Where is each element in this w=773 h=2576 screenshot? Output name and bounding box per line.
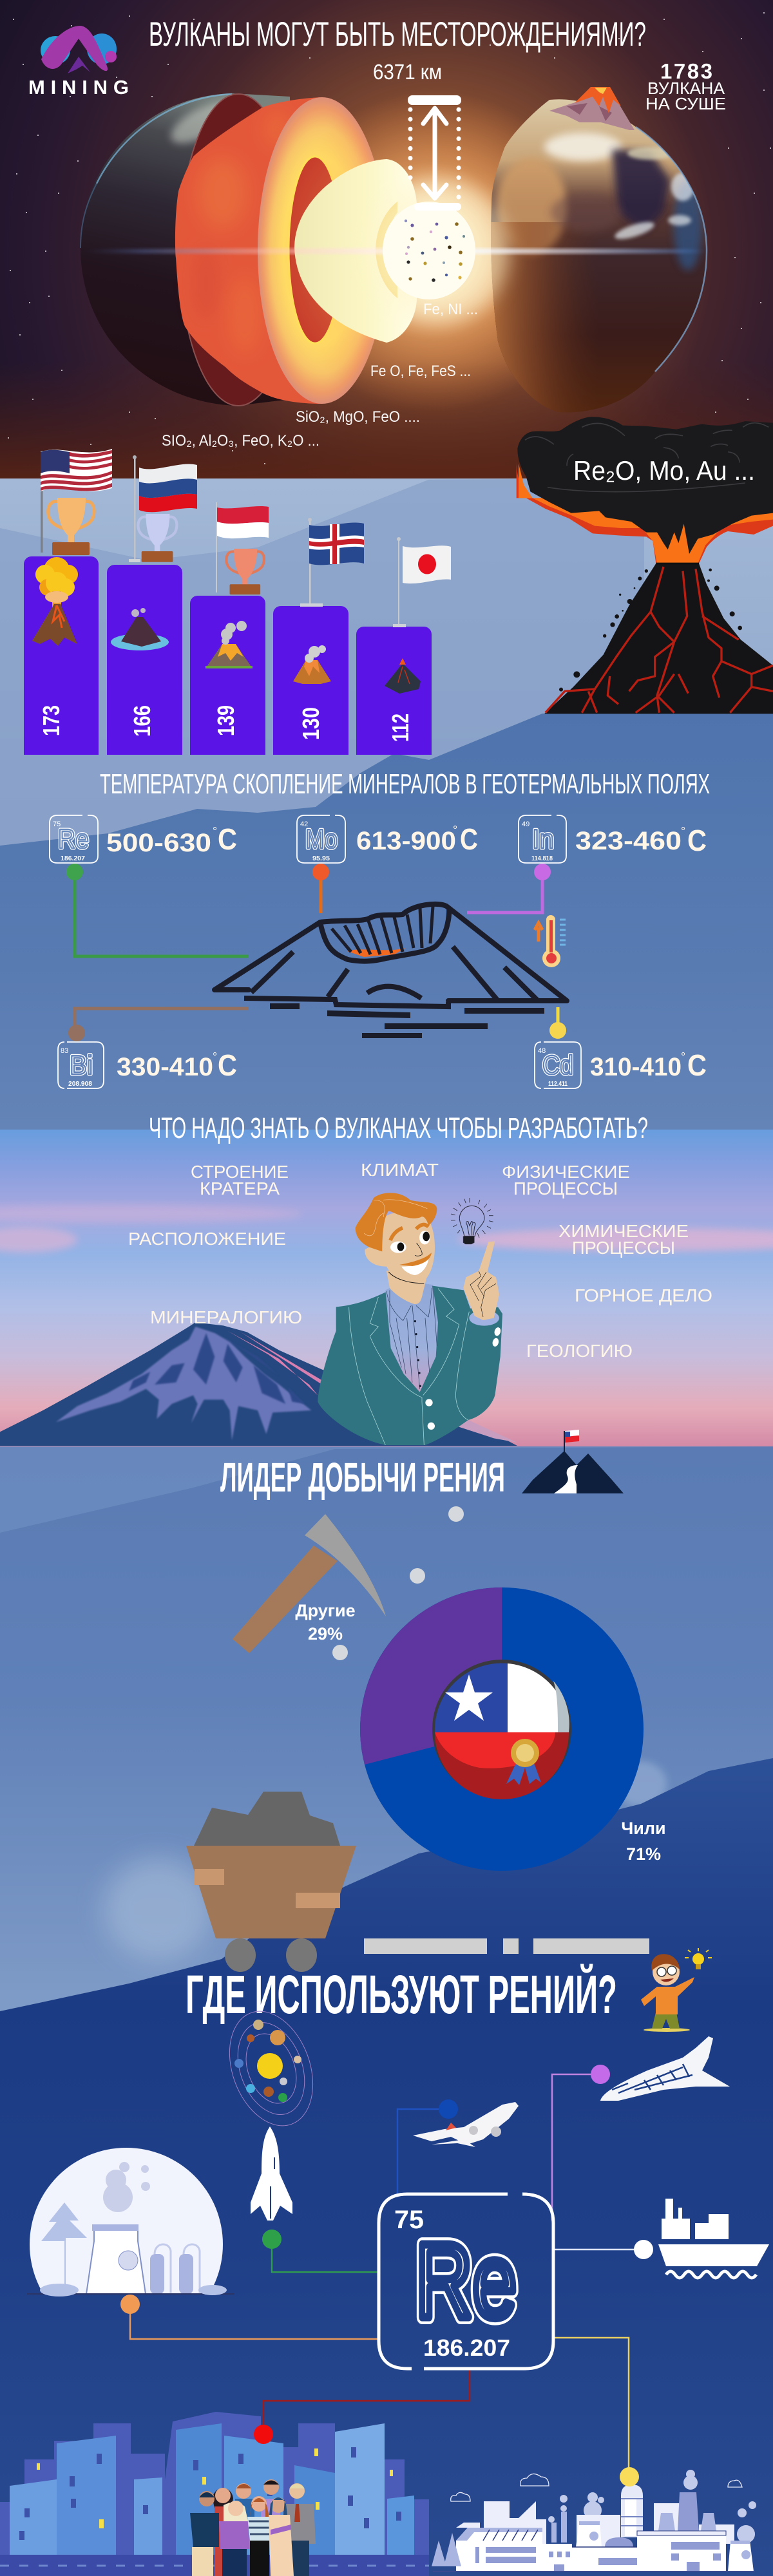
element tile: rhenium: Re — [58, 824, 89, 854]
icon: light bulb — [451, 1198, 493, 1244]
temperature: cadmium: 310-410 — [590, 1053, 682, 1081]
jacket lapels — [349, 1289, 469, 1445]
neck — [386, 1267, 430, 1304]
panel: where rhenium is used — [0, 1948, 769, 2576]
element tile: bismuth — [58, 1042, 104, 1088]
element tile: molybdenum: Mo — [305, 824, 338, 854]
topic: climate: КЛИМАТ — [361, 1160, 439, 1180]
illustration: group of people — [190, 2479, 316, 2576]
topic: physical processes — [502, 1162, 630, 1198]
volcano drawing — [517, 417, 773, 714]
pointing hand — [463, 1241, 499, 1320]
layer composition labels: SIO₂, Al₂O₃, FeO, K₂O ... — [162, 432, 320, 450]
icon: mountains with Chile flag — [522, 1430, 624, 1493]
inner core — [383, 202, 475, 299]
ash cloud — [517, 417, 773, 554]
outer core hollow ring — [376, 202, 397, 298]
element tile: bismuth: 208.908 — [68, 1081, 92, 1088]
eyes — [390, 1231, 430, 1253]
icon: rocket — [251, 2126, 292, 2221]
element tile: indium: 49 — [522, 820, 530, 828]
icon: island volcano Russia — [111, 608, 169, 650]
topic: location: РАСПОЛОЖЕНИЕ — [128, 1229, 286, 1249]
icon: mine cart with coal — [186, 1792, 356, 1972]
donut chart — [360, 1587, 644, 1871]
shirt cuff — [469, 1311, 499, 1326]
trophy: second place — [138, 514, 177, 562]
element tile: rhenium: 186.207 — [61, 855, 85, 862]
icon: eruption volcano USA — [32, 557, 78, 646]
chin line — [388, 1272, 424, 1283]
element tile: cadmium: 48 — [538, 1047, 546, 1055]
bar: USA 173: 173 — [38, 705, 64, 736]
label: others: Другие — [295, 1601, 356, 1620]
bar: USA 173 — [24, 556, 99, 755]
front row — [190, 2491, 294, 2576]
icon: cloud logo — [41, 26, 117, 73]
back row — [213, 2479, 316, 2576]
mantle layer — [175, 97, 322, 404]
eyebrows — [390, 1225, 428, 1240]
topic: crater structure: КРАТЕРА — [200, 1179, 280, 1198]
temperature: molybdenum: C — [460, 822, 478, 856]
jacket buttons — [425, 1327, 502, 1430]
element tile: rhenium: 75 — [53, 820, 61, 828]
moustache and smile — [399, 1253, 432, 1275]
icon: space shuttle — [600, 2036, 730, 2101]
trophy: first place — [48, 498, 94, 555]
topic: mineralogy: МИНЕРАЛОГИЮ — [150, 1307, 302, 1327]
label: Chile: 71% — [626, 1844, 661, 1864]
connector dots lower — [254, 2425, 639, 2486]
plume fire edge — [517, 462, 773, 564]
bar: Iceland 130: 130 — [298, 707, 324, 740]
divider bars — [364, 1938, 649, 1954]
element tile: indium: In — [532, 824, 554, 854]
label: others — [295, 1601, 356, 1643]
element tile: bismuth: Bi — [70, 1050, 93, 1080]
hair — [356, 1193, 437, 1251]
land volcano count: НА СУШЕ — [645, 94, 726, 113]
face — [365, 1212, 435, 1282]
icon: small volcano on globe — [549, 87, 635, 130]
ground line — [433, 2571, 755, 2572]
crater rim — [656, 561, 699, 566]
mantle cut face — [258, 97, 386, 404]
flag: Japan — [393, 537, 451, 627]
icon: solar system — [215, 2000, 328, 2137]
core glow — [367, 180, 509, 322]
element tile: molybdenum: 42 — [300, 820, 308, 828]
connector lines — [130, 2074, 644, 2477]
topic: chemical processes: ХИМИЧЕСКИЕ — [558, 1221, 689, 1241]
layer composition labels: Fe O, Fe, FeS ... — [370, 363, 471, 380]
temperature: molybdenum: 613-900 — [356, 827, 456, 855]
temperature: rhenium: 500-630 — [106, 829, 211, 857]
land volcano count: ВУЛКАНА — [647, 79, 725, 98]
logo wordmark: MINING — [28, 76, 129, 99]
glow — [271, 90, 593, 412]
ash cloud swirls — [525, 423, 768, 492]
cooling tower and dome — [572, 2485, 650, 2571]
bar: Iceland 130 — [273, 606, 348, 755]
trophy: third place — [226, 549, 264, 594]
element tile: molybdenum: 95.95 — [312, 855, 330, 862]
temperature: bismuth: C — [218, 1048, 237, 1082]
hair strands — [364, 1200, 427, 1236]
icon: thermometer — [535, 915, 566, 967]
temperature: bismuth — [117, 1048, 237, 1082]
heading: ЛИДЕР ДОБЫЧИ РЕНИЯ — [220, 1454, 505, 1501]
outer core cavity — [289, 156, 341, 343]
rhenium element tile: 186.207 — [423, 2334, 510, 2361]
connector lines — [75, 876, 558, 1033]
stars — [8, 13, 771, 464]
main left building — [456, 2528, 542, 2571]
bar: Indonesia 139: 139 — [213, 705, 239, 736]
flying rocks — [559, 569, 742, 692]
temperature: molybdenum — [356, 822, 478, 856]
temperature: indium: ° — [681, 825, 685, 838]
element tile: cadmium: Cd — [542, 1050, 573, 1080]
depth arrow 6371 km — [408, 95, 461, 198]
element tile: indium: 114.818 — [531, 855, 553, 862]
layer composition labels: Fe, NI ... — [423, 301, 478, 318]
temperature: rhenium: C — [218, 822, 237, 856]
shirt details — [386, 1286, 437, 1389]
Chile flag badge — [432, 1660, 571, 1799]
icon: ship — [658, 2199, 769, 2278]
connector dots — [66, 864, 566, 1041]
outline clouds — [451, 2474, 742, 2501]
smoke — [548, 2470, 756, 2543]
character: cheering boy — [641, 1954, 694, 2032]
temperature: bismuth: 330-410 — [117, 1053, 213, 1081]
mountain peak — [0, 1322, 517, 1446]
outer core — [294, 159, 417, 343]
panel: erupting volcano — [517, 417, 773, 714]
left hemisphere — [81, 93, 290, 406]
lava cracks — [546, 567, 773, 713]
topic: physical processes: ПРОЦЕССЫ — [513, 1179, 618, 1198]
icon: dark volcano Japan — [385, 658, 421, 694]
mid block and chimneys — [542, 2512, 572, 2572]
temperature: rhenium: ° — [213, 825, 217, 838]
topic: geology: ГЕОЛОГИЮ — [526, 1341, 633, 1361]
topic: chemical processes: ПРОЦЕССЫ — [572, 1238, 675, 1258]
label: Chile: Чили — [621, 1819, 666, 1838]
decorative ore dots — [332, 1506, 464, 1660]
right hemisphere — [490, 99, 707, 415]
flag: Russia — [129, 455, 197, 562]
rhenium element tile: 75 — [394, 2206, 424, 2234]
temperature: cadmium — [590, 1048, 707, 1082]
panel: mineral temperatures in geothermal fields — [50, 768, 710, 1088]
bar: Russia 166: 166 — [129, 705, 155, 737]
factory backdrop — [456, 2501, 734, 2547]
element tile: bismuth: Bi — [70, 1050, 93, 1080]
flag: USA — [41, 449, 112, 553]
rhenium element tile: Re — [415, 2222, 517, 2340]
element tile: rhenium — [50, 815, 98, 863]
medal — [506, 1739, 541, 1785]
flag: Iceland — [300, 518, 364, 607]
volcano outline diagram — [215, 904, 567, 1038]
panel: earth cross-section — [81, 87, 708, 415]
element tile: cadmium: 112.411 — [548, 1081, 568, 1088]
connector dots — [120, 2065, 653, 2314]
topic: crater structure: СТРОЕНИЕ — [191, 1162, 289, 1182]
temperature: indium: 323-460 — [575, 827, 682, 855]
illustration: factory — [432, 2470, 756, 2572]
temperature: indium: C — [687, 824, 707, 857]
temperature: bismuth: ° — [213, 1050, 217, 1063]
right building — [637, 2492, 754, 2571]
element tile: cadmium: Cd — [542, 1050, 573, 1080]
icon: yellow bulb — [685, 1948, 712, 1969]
bar: Japan 112 — [356, 627, 432, 755]
element tile: cadmium — [535, 1042, 581, 1088]
element tile: bismuth: 83 — [61, 1047, 68, 1055]
bar: Indonesia 139 — [190, 596, 265, 755]
temperature: cadmium: C — [687, 1048, 707, 1082]
land volcano count: 1783 — [660, 59, 712, 83]
bar: Russia 166 — [107, 565, 182, 755]
element tile: molybdenum: Mo — [305, 824, 338, 854]
shirt — [385, 1283, 438, 1392]
label: others: 29% — [308, 1624, 343, 1643]
panel: what to know about volcanoes — [0, 1112, 712, 1446]
topic: chemical processes — [558, 1221, 689, 1258]
land volcano count — [645, 59, 726, 113]
volcano minerals label: Re₂O, Mo, Au ... — [573, 455, 755, 486]
icon: smoking volcano Indonesia — [205, 621, 253, 668]
illustration: city — [0, 2412, 429, 2576]
rhenium element tile: Re — [415, 2222, 517, 2340]
jacket — [318, 1286, 502, 1445]
topic: crater structure — [191, 1162, 289, 1198]
earth radius label: 6371 км — [373, 60, 442, 84]
flag: Indonesia — [216, 502, 269, 592]
layer composition labels: SiO₂, MgO, FeO .... — [296, 408, 420, 426]
finger lines — [470, 1271, 496, 1317]
topic: physical processes: ФИЗИЧЕСКИЕ — [502, 1162, 630, 1182]
mantle mottling — [192, 111, 290, 354]
panel: rhenium production leader — [186, 1430, 666, 1972]
character: smiling man pointing at idea — [318, 1193, 502, 1445]
nose — [415, 1243, 422, 1256]
logo — [28, 26, 129, 99]
element tile: indium: In — [532, 824, 554, 854]
temperature: molybdenum: ° — [453, 824, 457, 837]
element tile: molybdenum — [297, 815, 345, 863]
crust layer — [180, 94, 297, 406]
element tile: rhenium: Re — [58, 824, 89, 854]
temperature: indium — [575, 824, 707, 857]
temperature: rhenium — [106, 822, 237, 857]
temperature: cadmium: ° — [681, 1050, 685, 1063]
rhenium element tile — [379, 2194, 553, 2369]
icon: small volcano Iceland — [293, 645, 331, 684]
icon: airplane — [413, 2102, 519, 2147]
bar: Japan 112: 112 — [387, 714, 414, 742]
plume orange layer — [519, 464, 773, 564]
element tile: indium — [519, 815, 566, 863]
mineral dots — [405, 220, 465, 282]
label: Chile — [621, 1819, 666, 1864]
light flare — [81, 249, 708, 254]
panel: top five volcano countries bar chart — [24, 449, 451, 755]
trees — [432, 2533, 461, 2566]
icon: pickaxe — [233, 1514, 386, 1653]
cone — [544, 564, 773, 714]
layer composition labels — [162, 301, 478, 450]
topic: mining: ГОРНОЕ ДЕЛО — [575, 1285, 712, 1305]
icon: nuclear power plant — [27, 2148, 234, 2297]
